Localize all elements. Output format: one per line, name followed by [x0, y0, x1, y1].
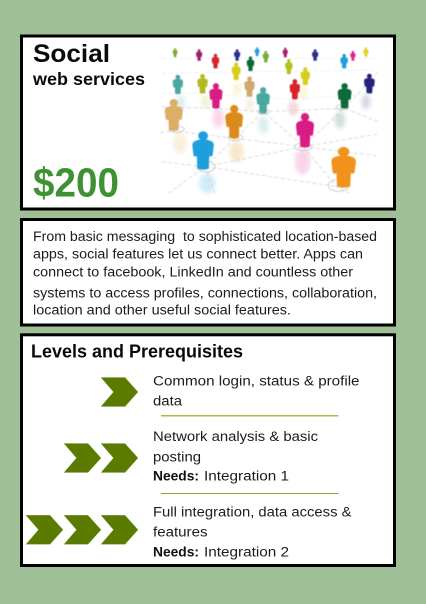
- panel: description: [22, 220, 394, 325]
- level 2 text: Network analysis & basic: [153, 429, 318, 445]
- level 1 text: [153, 374, 360, 410]
- image: network of people: [160, 46, 378, 195]
- level 1 chevrons: [101, 378, 138, 406]
- level 3 text: Integration 2: [204, 545, 289, 561]
- level 3 text: features: [153, 525, 208, 541]
- level 3 text: [153, 505, 352, 561]
- level 1 text: data: [153, 394, 182, 410]
- description text: systems to access profiles, connections, collaboration,: [33, 285, 377, 301]
- level 2 text: Integration 1: [204, 469, 289, 485]
- description text: [33, 229, 377, 318]
- level 2 chevrons: [64, 444, 138, 472]
- description text: connect to facebook, LinkedIn and countless other: [33, 265, 353, 281]
- level 3 text: Full integration, data access &: [153, 505, 352, 521]
- description text: location and other useful social features.: [33, 302, 291, 318]
- title: Social: [33, 40, 110, 68]
- heading: Levels and Prerequisites: [31, 342, 243, 362]
- description text: apps, social features let us connect better. Apps can: [33, 247, 363, 263]
- subtitle: web services: [32, 69, 145, 89]
- level 3 text: Needs:: [153, 545, 199, 561]
- level 2 text: [153, 429, 318, 485]
- panel: header: [22, 36, 394, 209]
- level 3 chevrons: [26, 515, 138, 544]
- price: $200: [33, 160, 119, 206]
- panel: levels and prerequisites: [22, 335, 394, 566]
- level 2 text: Needs:: [153, 469, 199, 485]
- level 2 text: posting: [153, 450, 201, 466]
- level 1 text: Common login, status & profile: [153, 374, 360, 390]
- description text: From basic messaging to sophisticated location-based: [33, 229, 377, 245]
